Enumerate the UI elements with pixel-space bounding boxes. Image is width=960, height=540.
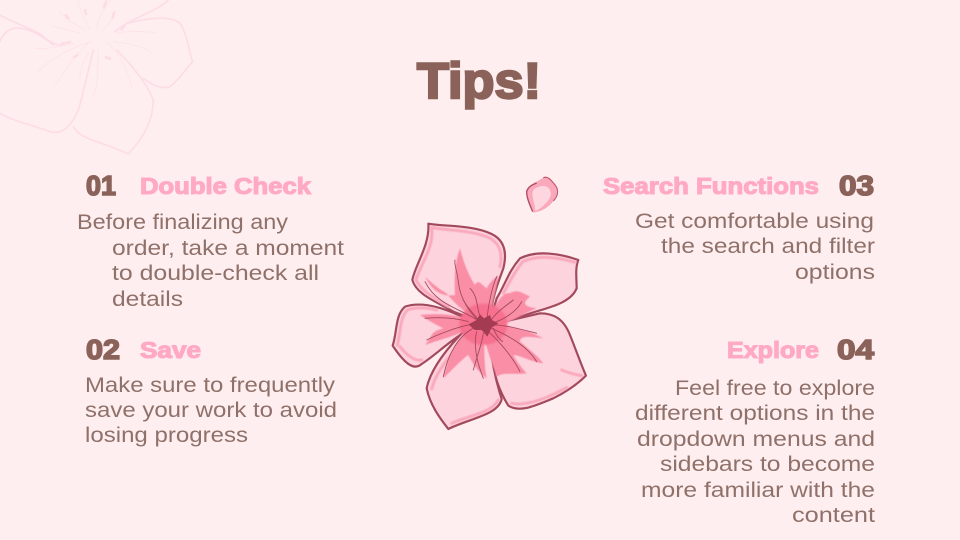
body text 01: order, take a moment [112,236,344,260]
body text 04: more familiar with the [641,478,875,502]
tip 02: save [85,334,337,447]
body text 03: options [795,260,875,284]
number 04: 04 [837,334,874,365]
heading: explore: Explore [727,337,819,363]
body text 02 [85,373,337,447]
heading: save: Save [140,337,201,363]
body text 04: dropdown menus and [637,427,875,451]
number 03: 03 [839,170,874,201]
tip 04: explore [635,334,875,527]
stamens and veins [425,260,537,378]
body text 04: sidebars to become [660,452,875,476]
top petal [412,224,505,323]
number 01: 01 [86,170,116,201]
heading: search functions: Search Functions [603,173,819,199]
bottom petal [427,328,502,429]
decorative flower outline, top left [0,0,193,154]
tip 03: search functions [603,170,875,284]
upper right petal [490,253,578,322]
body text 03: the search and filter [661,234,875,258]
body text 04: different options in the [635,401,875,425]
body text 03 [635,209,875,284]
body text 01 [77,210,344,311]
petal edge shading [397,228,582,423]
heading: double check: Double Check [140,173,311,199]
body text 01: details [112,287,183,311]
flower centre shading [420,248,543,378]
icon: large pink flower [393,224,586,429]
body text 02: save your work to avoid [85,398,337,422]
body text 04 [635,376,875,527]
body text 03: Get comfortable using [635,209,874,233]
lower right petal [490,313,586,409]
body text 04: content [792,503,875,527]
number 02: 02 [86,334,120,365]
tip 01: double check [77,170,344,311]
icon: falling petal [526,177,558,213]
body text 04: Feel free to explore [675,376,875,400]
body text 02: Make sure to frequently [85,373,335,397]
left petal [393,305,480,367]
body text 01: to double-check all [112,261,319,285]
title: Tips! [417,53,541,109]
body text 02: losing progress [85,423,248,447]
body text 01: Before finalizing any [77,210,288,234]
flower core [468,314,498,337]
